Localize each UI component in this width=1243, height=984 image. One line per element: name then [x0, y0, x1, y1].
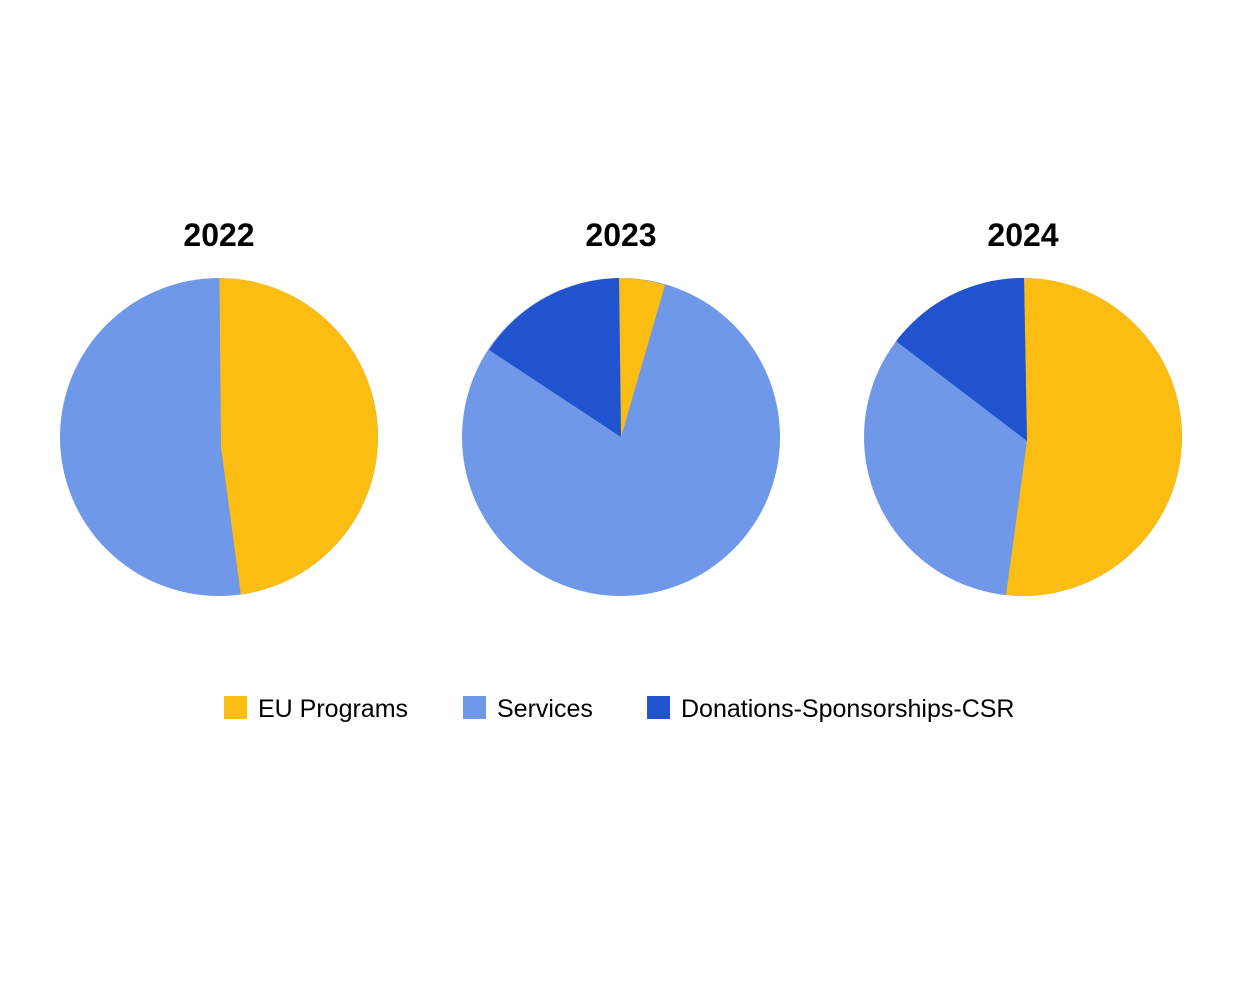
pie chart: 2024 [864, 278, 1182, 596]
title: 2022: 2022 [183, 217, 255, 253]
title: 2024: 2024 [987, 217, 1059, 253]
legend: Services [497, 695, 593, 723]
pie chart: 2023 [462, 278, 780, 596]
legend: EU Programs [258, 695, 408, 723]
legend: Donations-Sponsorships-CSR [681, 695, 1014, 723]
legend [224, 695, 1014, 723]
pie chart: 2022 [60, 278, 378, 596]
title: 2023: 2023 [585, 217, 657, 253]
